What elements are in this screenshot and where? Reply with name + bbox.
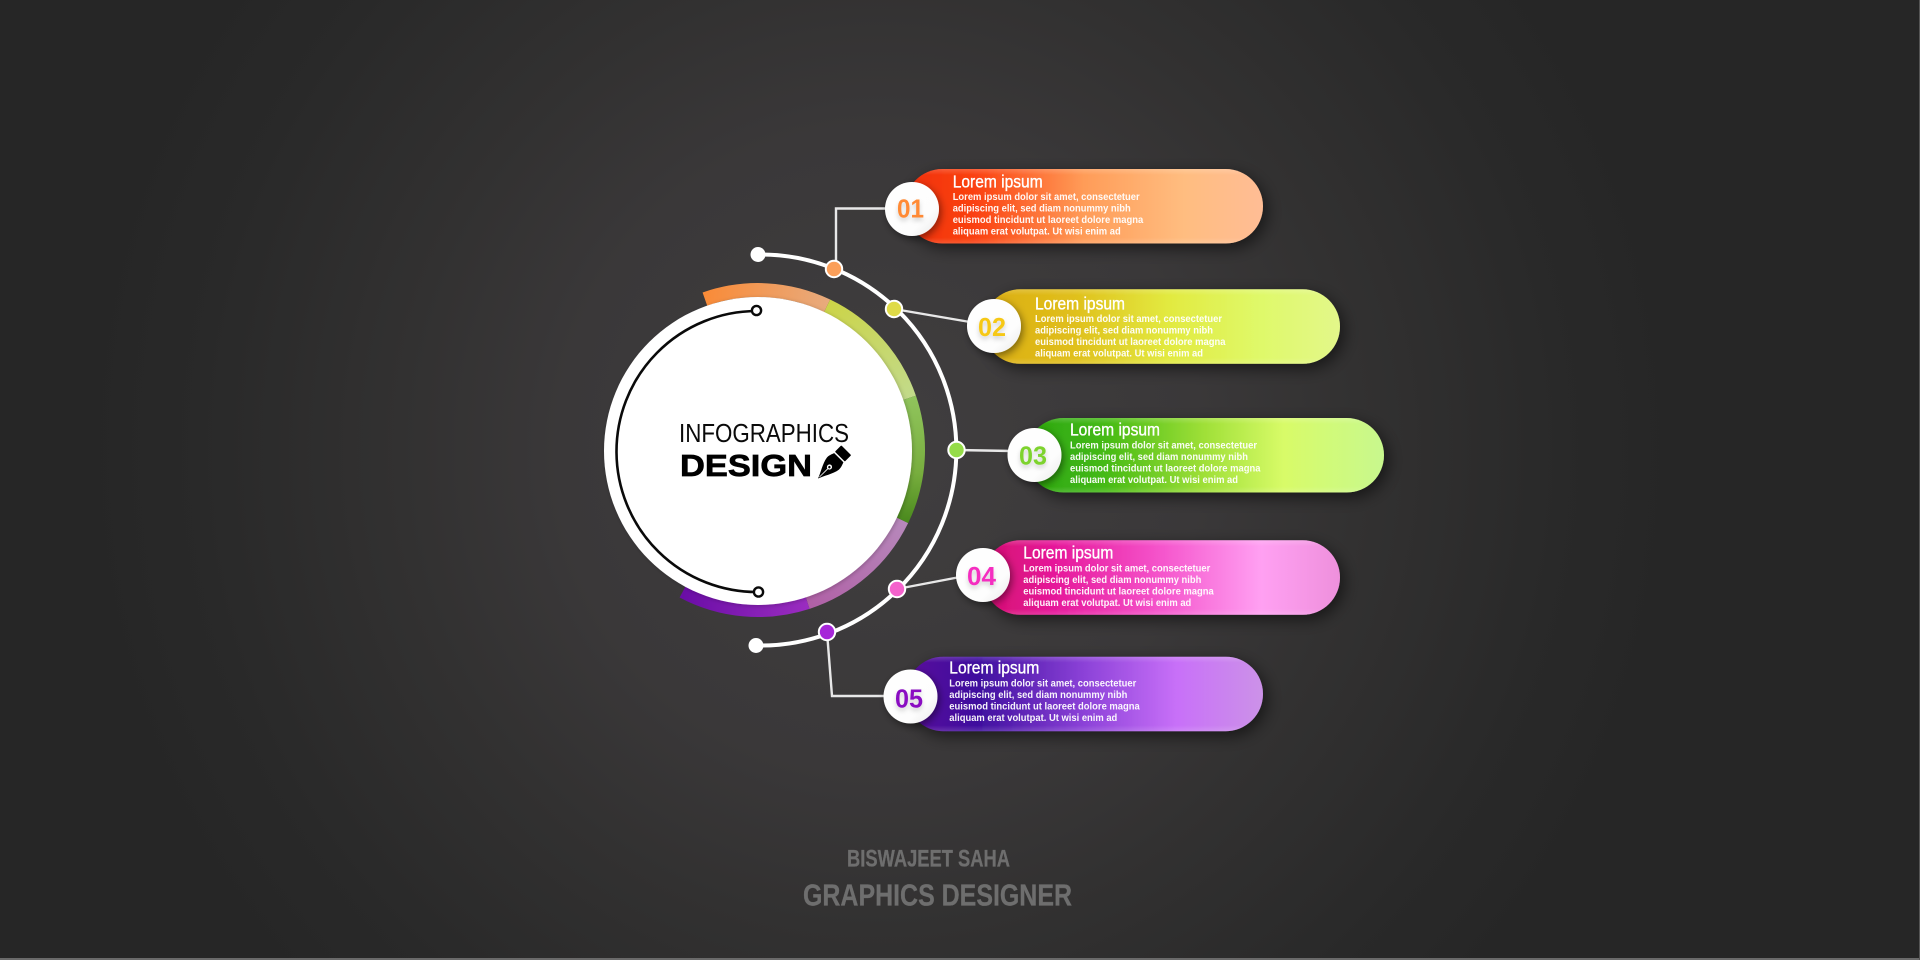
footer credits: GRAPHICS DESIGNER [803,878,1072,913]
inner black arc with end rings [616,306,763,597]
panel: item 04: Lorem ipsum dolor sit amet, consectetuer [1023,563,1210,575]
panel: item 03: 03 [1019,440,1047,470]
progress ring around central circle [683,290,918,610]
panel: item 03 [1008,418,1384,492]
panel: item 01: adipiscing elit, sed diam nonummy nibh [953,203,1131,215]
panel: item 02: Lorem ipsum dolor sit amet, consectetuer [1035,313,1222,325]
panel: item 04: aliquam erat volutpat. Ut wisi enim ad [1023,597,1191,609]
panel: item 05: Lorem ipsum dolor sit amet, consectetuer [949,678,1136,690]
panel: item 05: 05 [895,684,923,714]
panel: item 02: euismod tincidunt ut laoreet dolore magna [1035,336,1226,348]
panel: item 01: 01 [897,194,924,224]
panel: item 04 [956,540,1340,615]
panel: item 02: aliquam erat volutpat. Ut wisi enim ad [1035,348,1203,360]
panel: item 04: 04 [967,561,997,591]
central title: INFOGRAPHICS [679,418,849,448]
panel: item 02: Lorem ipsum [1035,293,1125,313]
panel: item 03: euismod tincidunt ut laoreet dolore magna [1070,462,1261,474]
central title [679,418,849,483]
panel: item 03: Lorem ipsum [1070,419,1160,439]
panel: item 05: Lorem ipsum [949,657,1039,677]
connector nodes [819,261,965,640]
panel: item 03: adipiscing elit, sed diam nonummy nibh [1070,451,1248,463]
panel: item 05: aliquam erat volutpat. Ut wisi enim ad [949,712,1117,724]
outer white arc [748,247,956,653]
panel: item 04: Lorem ipsum [1023,542,1113,562]
panel: item 03: aliquam erat volutpat. Ut wisi enim ad [1070,474,1238,486]
panel: item 01 [885,169,1263,244]
panel: item 05: euismod tincidunt ut laoreet dolore magna [949,701,1140,713]
connector lines [827,208,1012,696]
panel: item 01: euismod tincidunt ut laoreet dolore magna [953,214,1143,226]
panel: item 04: adipiscing elit, sed diam nonummy nibh [1023,574,1201,586]
panel: item 02 [967,289,1340,364]
panel: item 01: aliquam erat volutpat. Ut wisi enim ad [953,226,1121,238]
panel: item 03: Lorem ipsum dolor sit amet, consectetuer [1070,439,1257,451]
icon: fountain pen nib [812,444,852,485]
panel: item 05: adipiscing elit, sed diam nonummy nibh [949,689,1127,701]
panel: item 02: 02 [978,312,1006,342]
central title: DESIGN [680,448,812,483]
central white circle [604,297,912,605]
footer credits: BISWAJEET SAHA [847,846,1010,873]
footer credits [803,846,1072,913]
panel: item 01: Lorem ipsum dolor sit amet, consectetuer [953,191,1140,203]
panel: item 02: adipiscing elit, sed diam nonummy nibh [1035,324,1213,336]
panel: item 05 [884,657,1263,731]
panel: item 04: euismod tincidunt ut laoreet dolore magna [1023,586,1214,598]
panel: item 01: Lorem ipsum [953,171,1043,191]
